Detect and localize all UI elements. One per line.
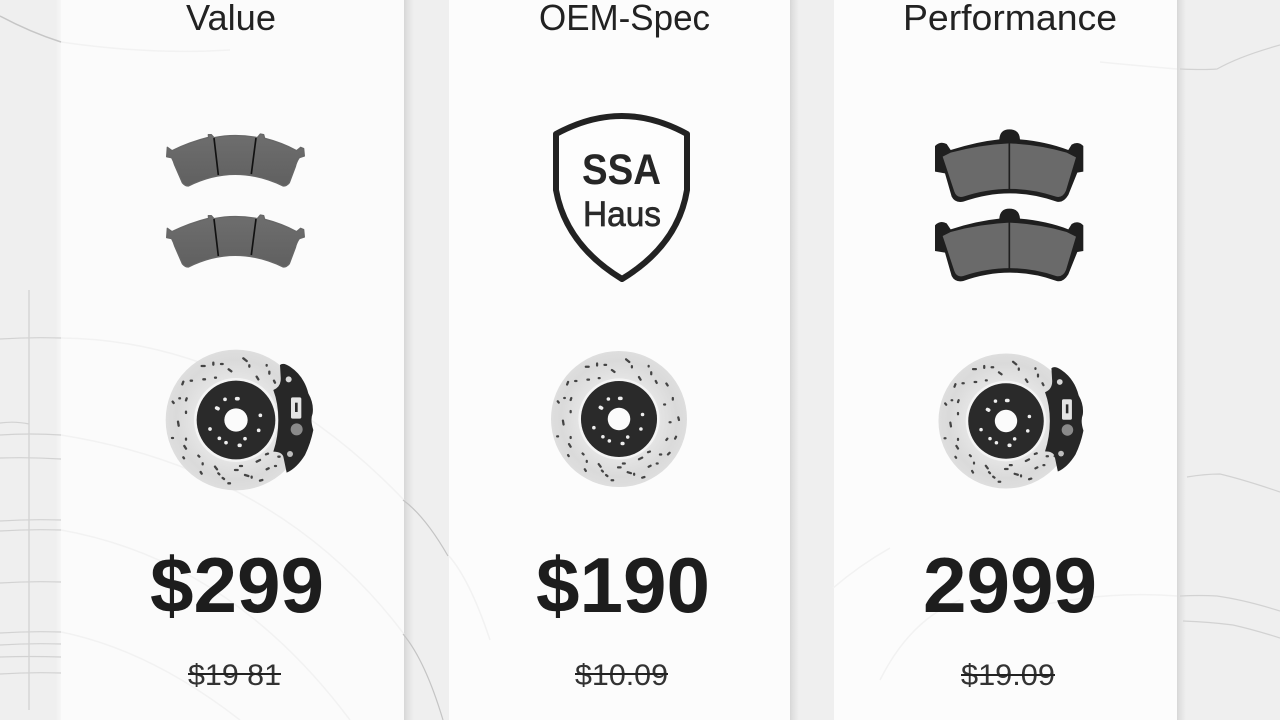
icon: rotor with caliper <box>938 353 1083 489</box>
icon: performance brake pads <box>935 129 1083 281</box>
panel: performance <box>833 0 1186 720</box>
price: value: $299 <box>150 541 324 629</box>
panel: value <box>56 0 414 720</box>
icon: value brake pads <box>167 134 304 267</box>
old price: oem-spec: $10.09 <box>575 659 668 692</box>
icon: ssa haus shield <box>556 116 687 279</box>
old price: performance: $19.09 <box>961 659 1055 692</box>
icon: ssa haus shield: SSA <box>582 146 661 194</box>
icon: rotor <box>551 351 687 487</box>
panel: oem-spec <box>449 0 799 720</box>
icon: ssa haus shield: Haus <box>583 195 661 234</box>
old price: value: $19 81 <box>188 659 281 692</box>
price: performance: 2999 <box>923 541 1097 629</box>
price: oem-spec: $190 <box>536 541 710 629</box>
icon: rotor with caliper <box>166 350 313 490</box>
